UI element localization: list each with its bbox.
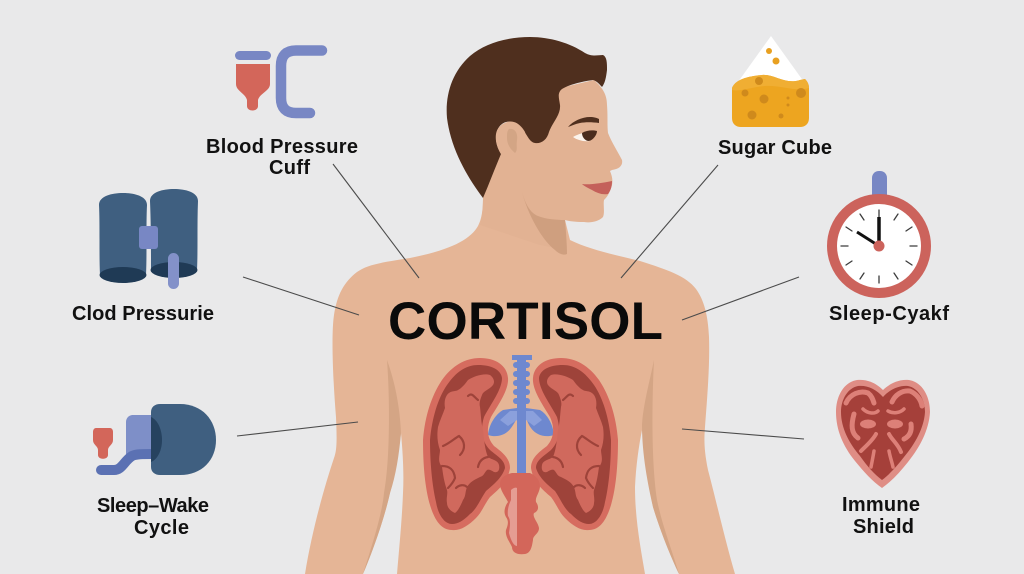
label: Immune Shield: Shield [853,516,914,538]
right arm shadow [642,360,679,574]
body silhouette [305,195,735,574]
label: Sleep-Cyakf: Sleep-Cyakf [829,303,949,325]
label: Immune Shield [842,494,920,538]
icon: sugar cube [732,36,809,127]
eye [573,130,597,141]
icon: dark cuffs [99,189,198,289]
ear [496,122,528,172]
label: Blood Pressure Cuff [206,136,358,179]
face and neck [480,80,622,250]
figure: human body and head [305,37,735,574]
icon: clock [832,171,926,293]
lips [582,181,612,194]
hair [447,37,607,198]
label: Sleep-Wake Cycle [97,495,209,539]
lower organ [500,473,540,554]
label: Sugar Cube: Sugar Cube [718,137,832,159]
bronchi and trachea [488,355,554,475]
label: Clod Pressurie: Clod Pressurie [72,303,214,325]
icon: immune shield heart [836,380,930,488]
left arm shadow [363,360,401,574]
icon: blood pressure cuff [235,50,322,113]
label: Immune Shield: Immune [842,494,920,516]
connector lines [237,164,804,439]
organs illustration [423,355,618,554]
eyebrow [568,117,599,127]
label: Sleep-Wake Cycle: Sleep–Wake [97,495,209,517]
left lung [423,358,510,530]
title: CORTISOL: CORTISOL [388,292,663,351]
label: Blood Pressure Cuff: Blood Pressure [206,136,358,158]
label: Sleep-Wake Cycle: Cycle [134,517,189,539]
label: Blood Pressure Cuff: Cuff [269,157,310,179]
right lung [531,358,618,530]
neck shadow [522,192,567,255]
icon: sleep-wake device [93,404,216,475]
